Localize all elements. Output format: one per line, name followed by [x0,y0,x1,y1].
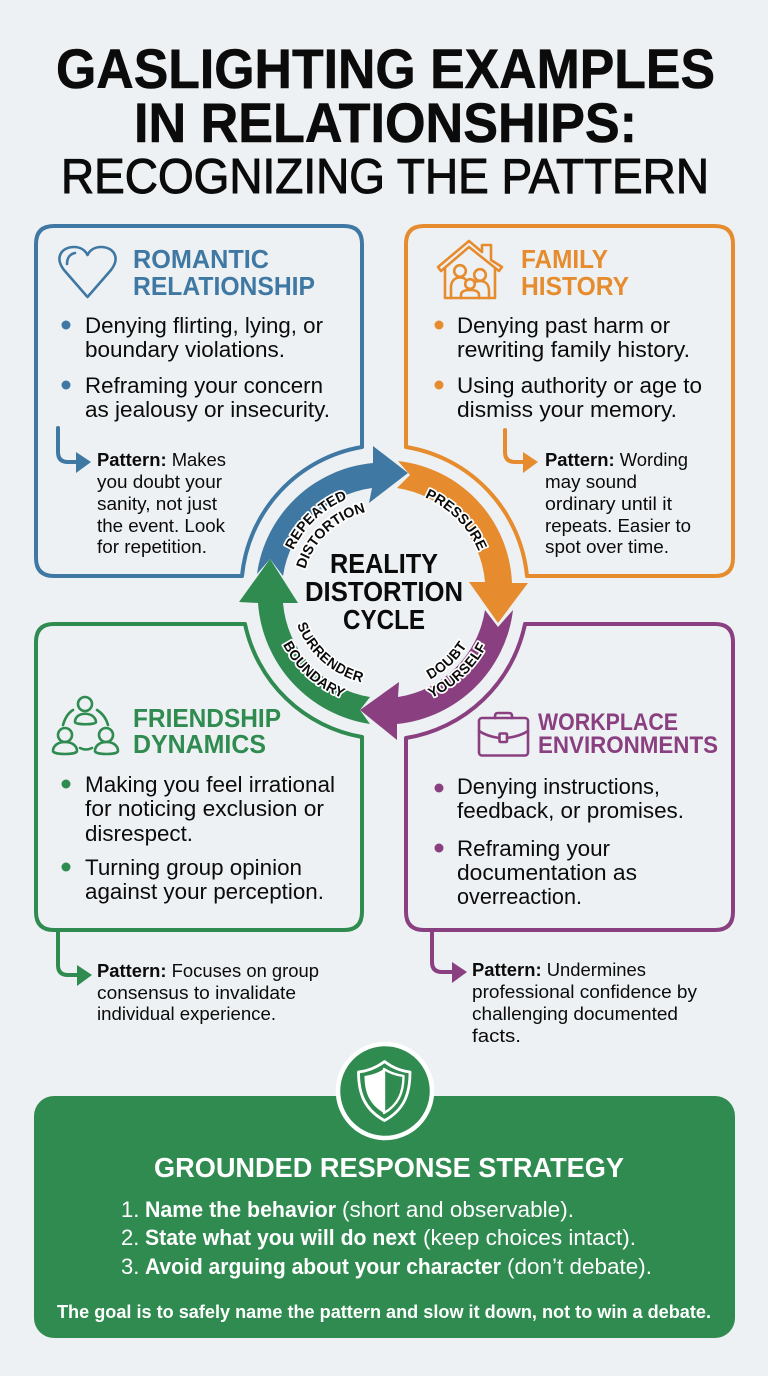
panel: friendship dynamics [36,624,362,1024]
title: RECOGNIZING THE PATTERN [61,150,709,204]
bullets: romantic relationship: as jealousy or insecurity. [85,397,330,422]
bullets: romantic relationship: Reframing your concern [85,373,323,398]
pattern note: workplace: Pattern: Undermines [472,960,646,980]
labels on cycle arrows: DISTORTION [294,501,366,570]
bullets: workplace environments: Reframing your [457,836,610,861]
arrow: workplace pattern connector [432,932,467,983]
bullets: family history: Using authority or age to [457,373,702,398]
pattern note: family [545,450,691,557]
cycle center label: REALITY [330,548,438,579]
pattern note: workplace: challenging documented [472,1004,678,1024]
labels on cycle arrows: YOURSELF [425,640,486,698]
pattern note: friendship [97,961,319,1024]
numbered strategy list: State what you will do next [145,1225,417,1250]
pattern note: workplace: professional confidence by [472,982,697,1002]
cycle center label [305,548,463,635]
bullets: family history: dismiss your memory. [457,397,677,422]
bullets: friendship dynamics: disrespect. [85,821,193,846]
numbered strategy list: Name the behavior [145,1197,336,1222]
pattern note: romantic: for repetition. [97,537,207,557]
pattern note: romantic: Pattern: Makes [97,450,226,470]
numbered strategy list: Avoid arguing about your character [145,1254,501,1279]
heading: romantic relationship: RELATIONSHIP [133,271,315,301]
bullets: workplace environments: documentation as [457,860,637,885]
panel: family history [406,226,733,576]
chart: reality distortion cycle [239,446,528,740]
heading: friendship dynamics: FRIENDSHIP [133,703,281,733]
heading: family history: HISTORY [521,271,629,301]
arrow: friendship pattern connector [58,932,92,986]
bullets: friendship dynamics: Turning group opinion [85,855,302,880]
bullets: workplace environments: Denying instructions, [457,774,660,799]
pattern note: family: spot over time. [545,537,669,557]
arrow: doubt yourself [360,610,513,740]
bullets: friendship dynamics: Making you feel irrational [85,772,335,797]
panel: romantic relationship [36,226,362,576]
heading: workplace environments [538,709,718,759]
numbered strategy list: 2. [121,1225,139,1250]
icon: three friends [53,697,118,754]
heading: friendship dynamics: DYNAMICS [133,729,266,759]
labels on cycle arrows: SURRENDER [296,620,364,684]
numbered strategy list: 3. [121,1254,139,1279]
bullets: friendship dynamics: for noticing exclusion or [85,796,324,821]
labels on cycle arrows: BOUNDARY [281,638,348,698]
icon: house with family [438,241,502,298]
arrow: pressure [397,461,528,623]
pattern note: romantic: you doubt your [97,472,222,492]
panel: workplace environments [406,624,733,1046]
pattern note: romantic [97,450,226,557]
numbered strategy list: (keep choices intact). [423,1225,636,1250]
bullets: romantic relationship [62,313,330,422]
arrow: family pattern connector [505,430,538,473]
closing goal statement: The goal is to safely name the pattern and slow it down, not to win a debate. [57,1302,711,1322]
bullets: workplace environments: overreaction. [457,884,582,909]
pattern note: romantic: the event. Look [97,516,226,536]
pattern note: family: repeats. Easier to [545,516,691,536]
arrow: surrender boundary [239,559,370,724]
bullets: friendship dynamics: against your perception. [85,879,324,904]
labels on cycle arrows [281,487,489,698]
cycle center label: DISTORTION [305,576,463,607]
heading: family history [521,244,629,301]
pattern note: family: may sound [545,472,637,492]
pattern note: family: Pattern: Wording [545,450,688,470]
arrow: romantic pattern connector [58,428,91,473]
arrow: repeated distortion [257,446,408,576]
heading: friendship dynamics [133,703,281,759]
bullets: friendship dynamics [62,772,335,904]
heading: workplace environments: WORKPLACE [538,709,678,736]
heading: romantic relationship: ROMANTIC [133,244,269,274]
numbered strategy list: 1. [121,1197,139,1222]
icon: heart [59,247,116,297]
cycle center label: CYCLE [343,604,425,635]
labels on cycle arrows: PRESSURE [424,487,489,552]
heading: strategy: GROUNDED RESPONSE STRATEGY [154,1152,624,1183]
bullets: romantic relationship: Denying flirting, lying, or [85,313,323,338]
bullets: family history: Denying past harm or [457,313,670,338]
bullets: workplace environments [434,774,684,909]
pattern note: friendship: individual experience. [97,1004,276,1024]
labels on cycle arrows: REPEATED [283,490,347,551]
numbered strategy list [121,1197,652,1279]
pattern note: romantic: sanity, not just [97,494,217,514]
title [56,37,715,204]
icon: shield badge [338,1044,432,1138]
pattern note: friendship: consensus to invalidate [97,983,296,1003]
pattern note: workplace [472,960,697,1046]
numbered strategy list: (don’t debate). [507,1254,652,1279]
icon: briefcase [479,713,528,756]
bullets: family history [434,313,702,422]
panel: grounded response strategy [34,1044,735,1338]
bullets: romantic relationship: boundary violations. [85,337,285,362]
bullets: family history: rewriting family history. [457,337,690,362]
title: IN RELATIONSHIPS: [134,91,637,154]
heading: family history: FAMILY [521,244,608,274]
labels on cycle arrows: DOUBT [424,638,467,681]
pattern note: family: ordinary until it [545,494,672,514]
numbered strategy list: (short and observable). [342,1197,574,1222]
bullets: workplace environments: feedback, or promises. [457,798,684,823]
pattern note: friendship: Pattern: Focuses on group [97,961,319,981]
heading: workplace environments: ENVIRONMENTS [538,732,718,759]
title: GASLIGHTING EXAMPLES [56,37,715,100]
pattern note: workplace: facts. [472,1026,521,1046]
heading: romantic relationship [133,244,315,301]
